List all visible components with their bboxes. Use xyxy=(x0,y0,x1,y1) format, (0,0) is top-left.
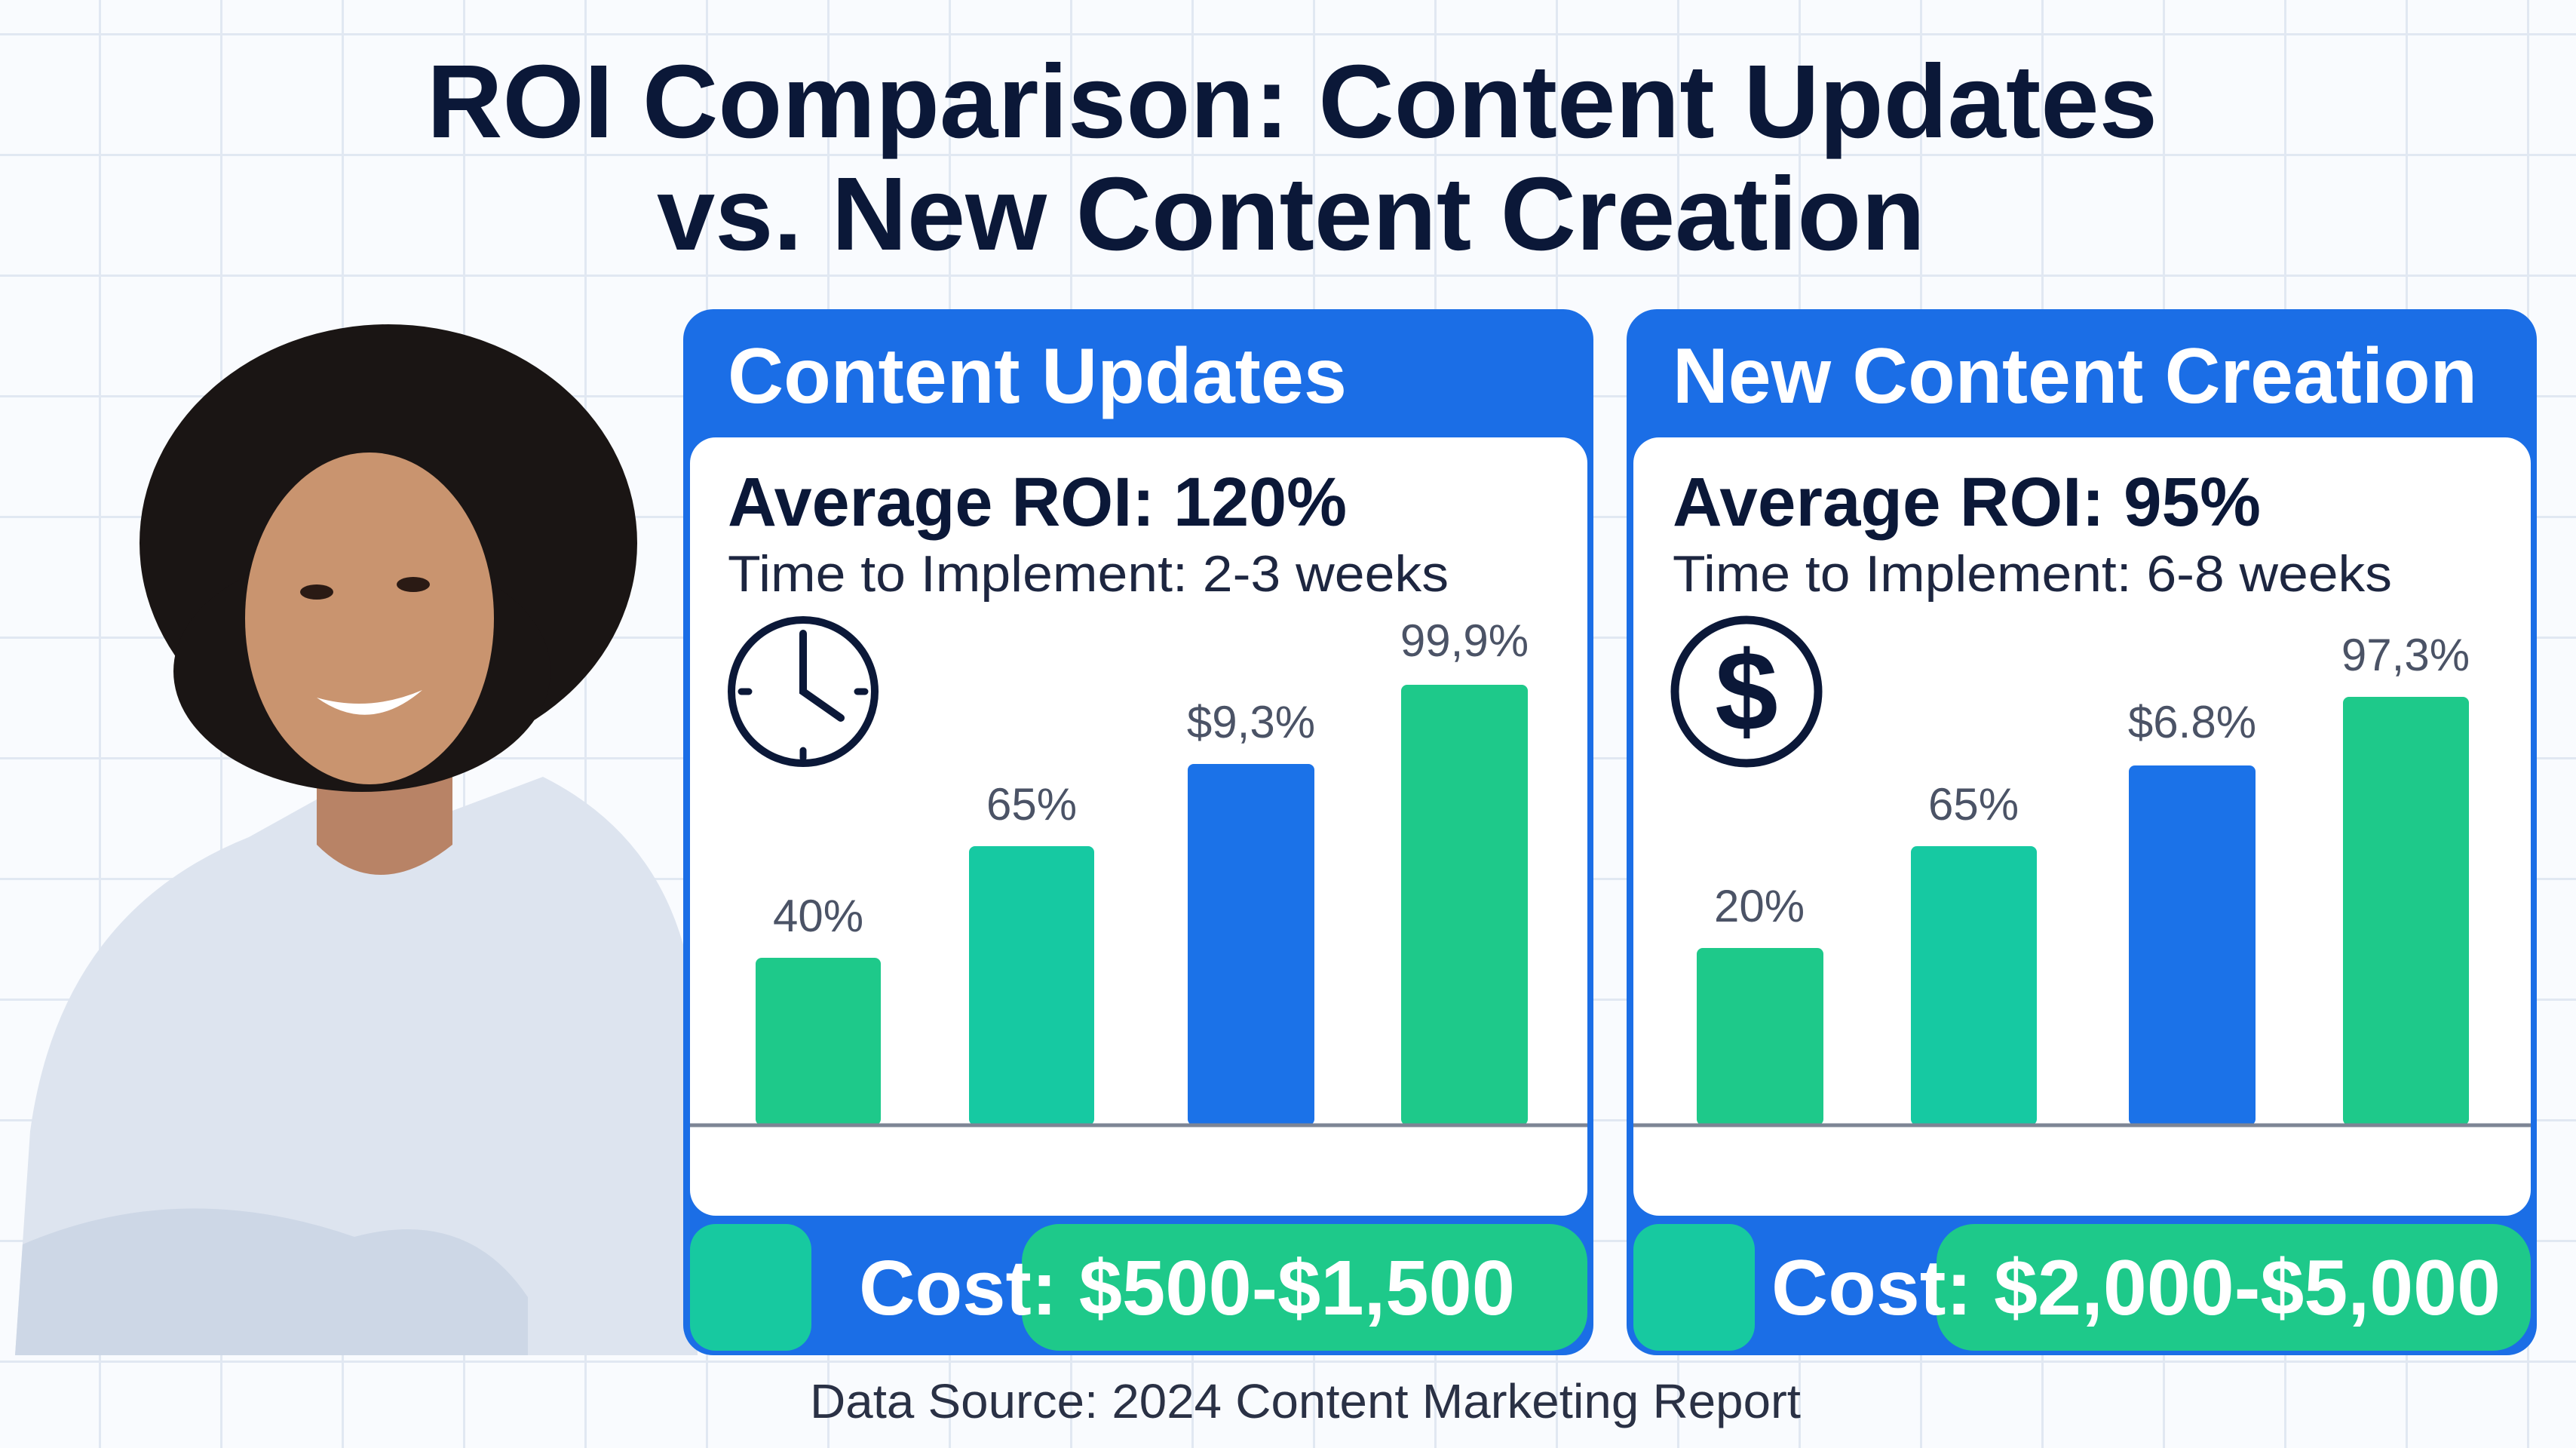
time to implement: Time to Implement: 2-3 weeks xyxy=(728,545,1449,603)
hair xyxy=(140,324,637,762)
bar chart: $9,3% xyxy=(1187,697,1315,747)
person photo xyxy=(15,324,698,1355)
cost footer: Cost: $500-$1,500 xyxy=(859,1244,1515,1331)
panel header: Content Updates xyxy=(728,333,1347,420)
bar chart: $6.8% xyxy=(2128,697,2256,747)
panel header: New Content Creation xyxy=(1673,333,2477,420)
cost footer xyxy=(1633,1224,2531,1351)
bar chart: 40% xyxy=(773,891,863,941)
panel: new content creation xyxy=(1627,309,2537,1355)
bar chart: 97,3% xyxy=(2341,630,2470,680)
cost footer xyxy=(690,1224,1587,1351)
average roi: Average ROI: 120% xyxy=(728,464,1347,541)
bar chart: 65% xyxy=(986,779,1077,830)
bar chart: 20% xyxy=(1714,881,1805,931)
bar chart xyxy=(690,615,1587,1125)
icon: dollar xyxy=(1675,620,1818,763)
neck xyxy=(317,724,452,875)
data source footer: Data Source: 2024 Content Marketing Report xyxy=(810,1374,1801,1428)
icon: dollar: $ xyxy=(1715,627,1778,754)
title xyxy=(427,44,2157,272)
cost footer: Cost: $2,000-$5,000 xyxy=(1771,1244,2501,1332)
face xyxy=(245,452,494,784)
average roi: Average ROI: 95% xyxy=(1673,464,2261,541)
shirt xyxy=(15,777,698,1355)
icon: clock xyxy=(731,620,875,763)
bar chart: 65% xyxy=(1928,779,2019,830)
panel: content updates xyxy=(683,309,1593,1355)
time to implement: Time to Implement: 6-8 weeks xyxy=(1673,545,2392,603)
title: ROI Comparison: Content Updates xyxy=(427,44,2157,160)
bar chart: 99,9% xyxy=(1400,615,1529,666)
bar chart xyxy=(1633,630,2531,1125)
title: vs. New Content Creation xyxy=(657,156,1925,272)
